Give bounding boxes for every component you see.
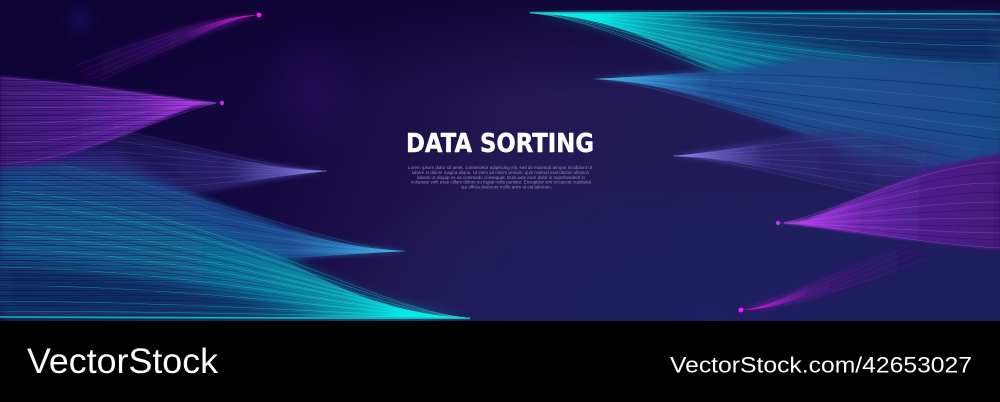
right stream: blue xyxy=(593,58,1000,165)
stream: cyan xyxy=(0,190,470,318)
right stream: purple xyxy=(776,154,1000,250)
right stream: bottom magenta xyxy=(739,241,930,312)
stream: blue and cyan blended base xyxy=(0,150,300,316)
stream: violet xyxy=(0,132,327,195)
right stream: cyan xyxy=(530,12,1000,141)
body text: laboris ut aliquip ex ea commodo consequat. Duis aute irure dolor in reprehenderit in xyxy=(417,175,585,180)
left data streams xyxy=(0,13,470,318)
background xyxy=(0,0,1000,321)
body text: Lorem ipsum dolor sit amet, consectetur adipiscing elit, sed do eiusmod tempor incididunt ut xyxy=(408,165,593,170)
stream: blue xyxy=(0,165,407,272)
body text xyxy=(408,165,593,190)
body text: labore et dolore magna aliqua. Ut enim ad minim veniam, quis nostrud exercitation ullamco xyxy=(412,170,589,175)
title: DATA SORTING xyxy=(406,129,594,159)
right stream: violet xyxy=(673,132,1000,195)
footer logo: VectorStock xyxy=(27,342,219,381)
right blended base xyxy=(700,15,1000,181)
stream: purple xyxy=(0,76,224,172)
body text: qui officia deserunt mollit anim id est laborum. xyxy=(461,184,552,190)
footer image id: VectorStock.com/42653027 xyxy=(670,352,972,378)
body text: voluptate velit esse cillum dolore eu fugiat nulla pariatur. Excepteur sint occaecat cupidatat xyxy=(411,180,592,184)
footer bar xyxy=(0,321,1000,402)
stream: top magenta xyxy=(70,13,261,84)
horizontal thread texture xyxy=(0,76,260,316)
